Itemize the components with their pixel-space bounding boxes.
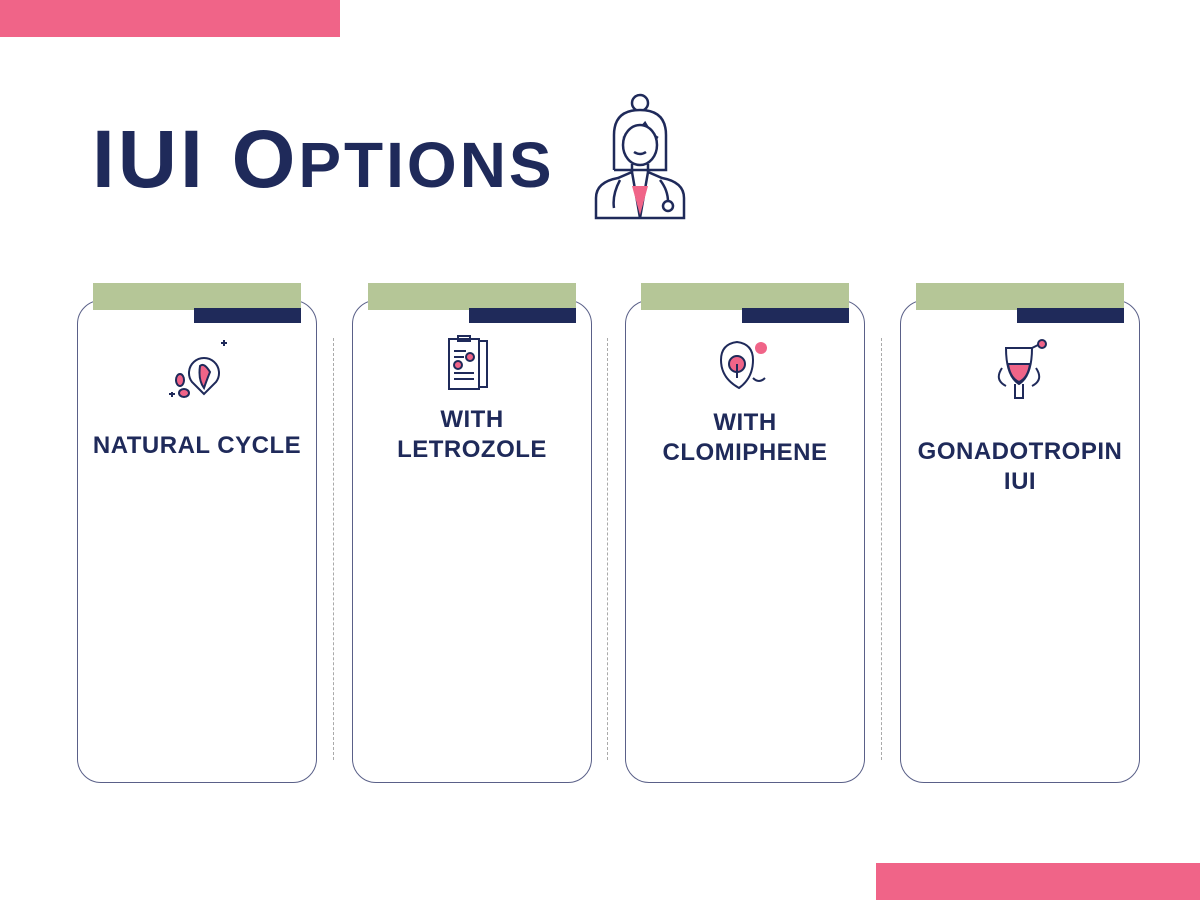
heading: WITH: [713, 409, 777, 436]
icon: uterus flower: [720, 341, 767, 390]
panel: letrozole: [352, 283, 592, 783]
heading: LETROZOLE: [397, 436, 547, 463]
icon: clipboard: [448, 335, 488, 390]
dividers: [333, 338, 334, 760]
heading: [918, 438, 1122, 495]
icon: egg: [169, 340, 227, 398]
heading: CLOMIPHENE: [662, 439, 828, 466]
panel: gonadotropin: [900, 283, 1140, 783]
panel: natural cycle: [77, 283, 317, 783]
top pink bar: [0, 0, 340, 37]
heading: WITH: [440, 406, 504, 433]
bottom pink bar: [876, 863, 1200, 900]
title: IUI OPTIONS: [92, 114, 555, 205]
heading: [662, 409, 828, 466]
panel: clomiphene: [625, 283, 865, 783]
heading: GONADOTROPIN: [918, 438, 1122, 465]
icon: uterus: [998, 339, 1047, 399]
icon: doctor: [594, 94, 686, 220]
heading: [397, 406, 547, 463]
heading: IUI: [1004, 468, 1036, 495]
heading: NATURAL CYCLE: [93, 432, 301, 459]
